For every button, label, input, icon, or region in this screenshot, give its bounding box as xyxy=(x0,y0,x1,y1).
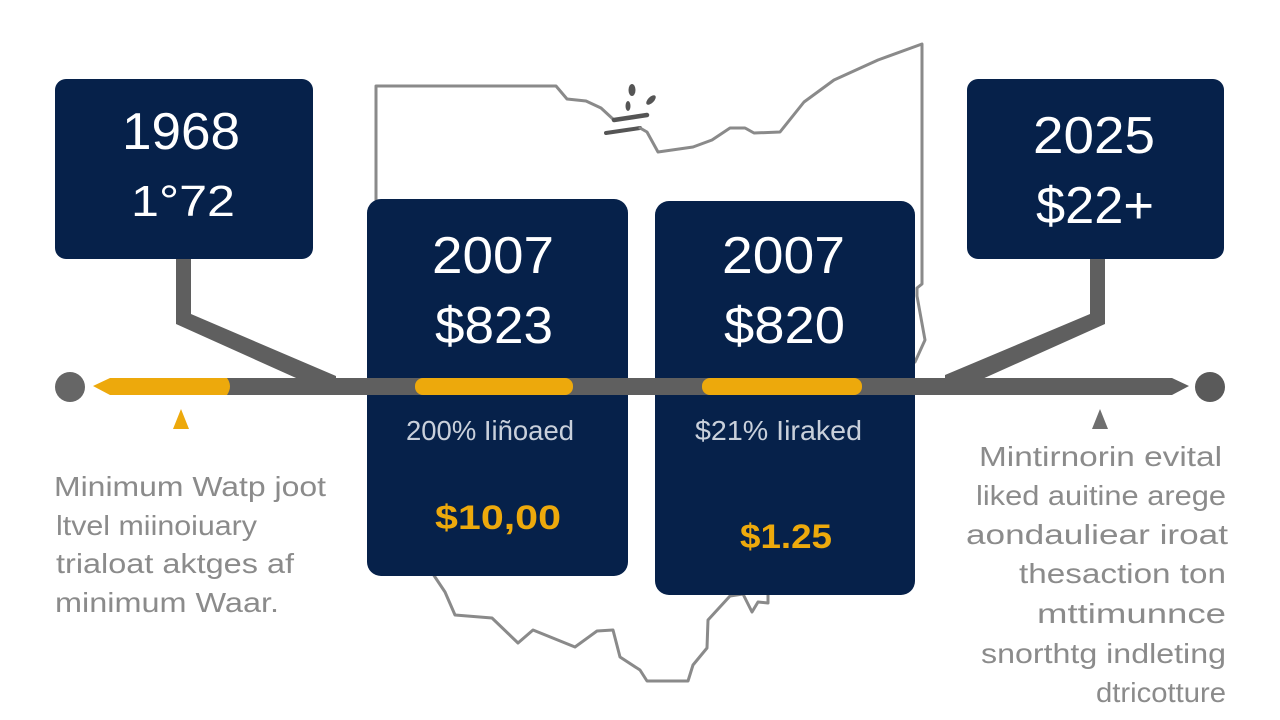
timeline xyxy=(55,372,1225,402)
right description text: aondauliear iroat xyxy=(966,519,1228,550)
card: 2025: 2025 xyxy=(1033,107,1155,165)
icon: islands xyxy=(626,84,657,111)
card: 2025: $22+ xyxy=(1036,177,1154,235)
card: 2007 right: 2007 xyxy=(722,227,845,285)
state outline map xyxy=(376,44,925,681)
connector: 1968 card to timeline xyxy=(176,259,336,390)
card: 2007 left: $823 xyxy=(435,297,553,355)
left description text: minimum Waar. xyxy=(55,587,279,618)
card: 2007 left: 2007 xyxy=(432,227,554,285)
card: 2007 right: $1.25 xyxy=(740,518,832,556)
pointer: gray triangle xyxy=(1092,409,1108,429)
connector: 2025 card to timeline xyxy=(945,259,1105,390)
card: 2007 right: $820 xyxy=(724,297,845,355)
left description text: ltvel miinoiuary xyxy=(56,510,257,541)
dot: start xyxy=(55,372,85,402)
timeline bar with arrow tip xyxy=(225,378,1189,395)
left description text: trialoat aktges af xyxy=(56,548,294,579)
right description text: dtricotture xyxy=(1096,677,1226,708)
card: 2007 right: $21% Iiraked xyxy=(695,415,862,446)
right description text: liked auitine arege xyxy=(976,480,1226,511)
left description text: Minimum Watp joot xyxy=(54,471,326,502)
card: 1968 xyxy=(55,79,313,259)
card: 2007 left: $10,00 xyxy=(435,499,561,537)
card: 1968: 1968 xyxy=(122,103,240,161)
card: 1968: 1°72 xyxy=(131,177,235,226)
right description text: snorthtg indleting xyxy=(981,638,1226,669)
dot: end xyxy=(1195,372,1225,402)
right description text: thesaction ton xyxy=(1019,558,1226,589)
card: 2007 right xyxy=(655,201,915,595)
timeline start segment xyxy=(93,378,230,395)
right description text xyxy=(966,441,1228,708)
marker: right card xyxy=(702,378,862,395)
right description text: mttimunnce xyxy=(1037,598,1226,629)
pointer: gold triangle xyxy=(173,409,189,429)
right description text: Mintirnorin evital xyxy=(979,441,1222,472)
card: 2007 left xyxy=(367,199,628,576)
card: 2007 left: 200% Iiñoaed xyxy=(406,415,574,446)
marker: left card xyxy=(415,378,573,395)
card: 2025 xyxy=(967,79,1224,259)
left description text xyxy=(54,471,326,618)
